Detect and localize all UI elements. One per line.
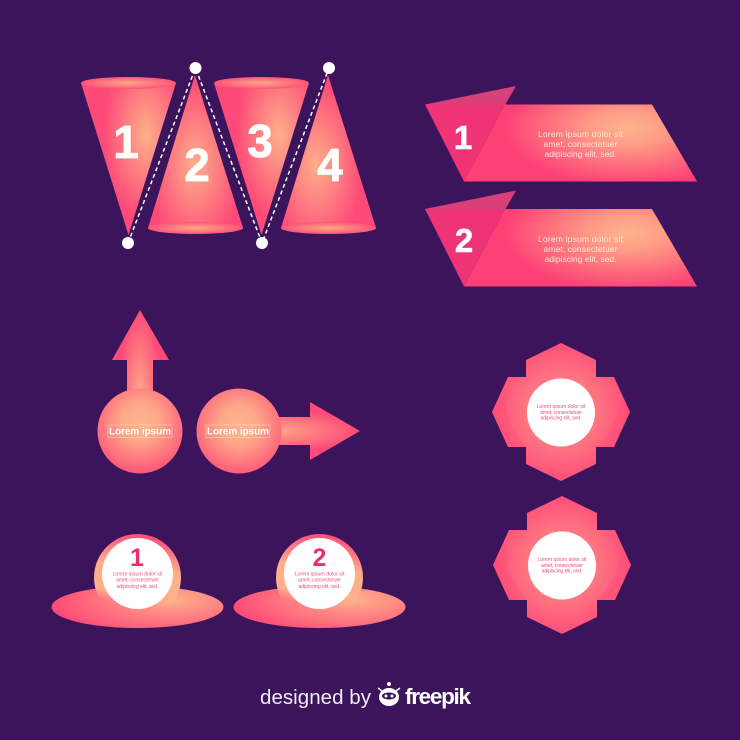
footer: freepik credit: freepik: [405, 684, 471, 709]
panel: badge bottom: adipiscing elit, sed.: [542, 568, 582, 574]
panel: badge bottom: Lorem ipsum dolor sit: [538, 557, 587, 563]
panel: hat 1: 1: [130, 544, 144, 572]
panel: ribbon 2: amet, consectetuer: [544, 244, 618, 254]
panel: badge top: amet, consectetuer: [540, 410, 582, 416]
cone 3: [214, 77, 309, 235]
panel: hat 2: Lorem ipsum dolor sit: [294, 572, 345, 578]
panel: ribbon 2: 2: [455, 222, 473, 259]
panel: ribbon 2: adipiscing elit, sed.: [544, 254, 616, 264]
panel: ribbon 1: amet, consectetuer: [544, 139, 618, 149]
footer: freepik credit: designed by: [260, 686, 372, 709]
cone 1: [81, 77, 176, 235]
arrow: up: Lorem ipsum: [109, 426, 171, 438]
panel: ribbon 1: 1: [454, 119, 472, 156]
dashed connector with dots: [122, 62, 335, 249]
panel: hat 2: amet, consectetuer: [298, 578, 341, 584]
panel: hat 2: [234, 534, 406, 628]
cone 2: [148, 75, 243, 234]
cone 2: 2: [184, 139, 210, 191]
panel: ribbon 2: Lorem ipsum dolor sit: [538, 234, 624, 244]
panel: badge top: Lorem ipsum dolor sit: [536, 404, 586, 410]
arrow: up: [98, 310, 182, 474]
footer: freepik credit: [260, 682, 471, 709]
cone 4: [281, 75, 376, 234]
arrow: right: [196, 388, 360, 474]
panel: badge top: [492, 343, 630, 481]
panel: badge top: adipiscing elit, sed.: [540, 416, 582, 422]
panel: numbered cones: [81, 62, 376, 249]
panel: hat 1: adipiscing elit, sed.: [116, 584, 158, 590]
panel: badge bottom: amet, consectetuer: [541, 563, 583, 569]
arrow: right: Lorem ipsum: [207, 426, 269, 438]
panel: hat 2: adipiscing elit, sed.: [298, 584, 340, 590]
panel: hat 1: amet, consectetuer: [116, 578, 159, 584]
panel: ribbon 1: adipiscing elit, sed.: [544, 149, 616, 159]
panel: badge bottom: [493, 496, 631, 634]
icon: freepik mascot: [378, 682, 400, 706]
panel: ribbon 1: [425, 86, 697, 182]
cone 4: 4: [317, 139, 343, 191]
panel: ribbon 2: [425, 190, 697, 286]
panel: hat 2: 2: [313, 544, 326, 572]
cone 3: 3: [247, 115, 273, 167]
panel: ribbon 1: Lorem ipsum dolor sit: [538, 129, 624, 139]
panel: hat 1: Lorem ipsum dolor sit: [112, 572, 163, 578]
cone 1: 1: [113, 116, 139, 168]
panel: hat 1: [52, 534, 224, 628]
